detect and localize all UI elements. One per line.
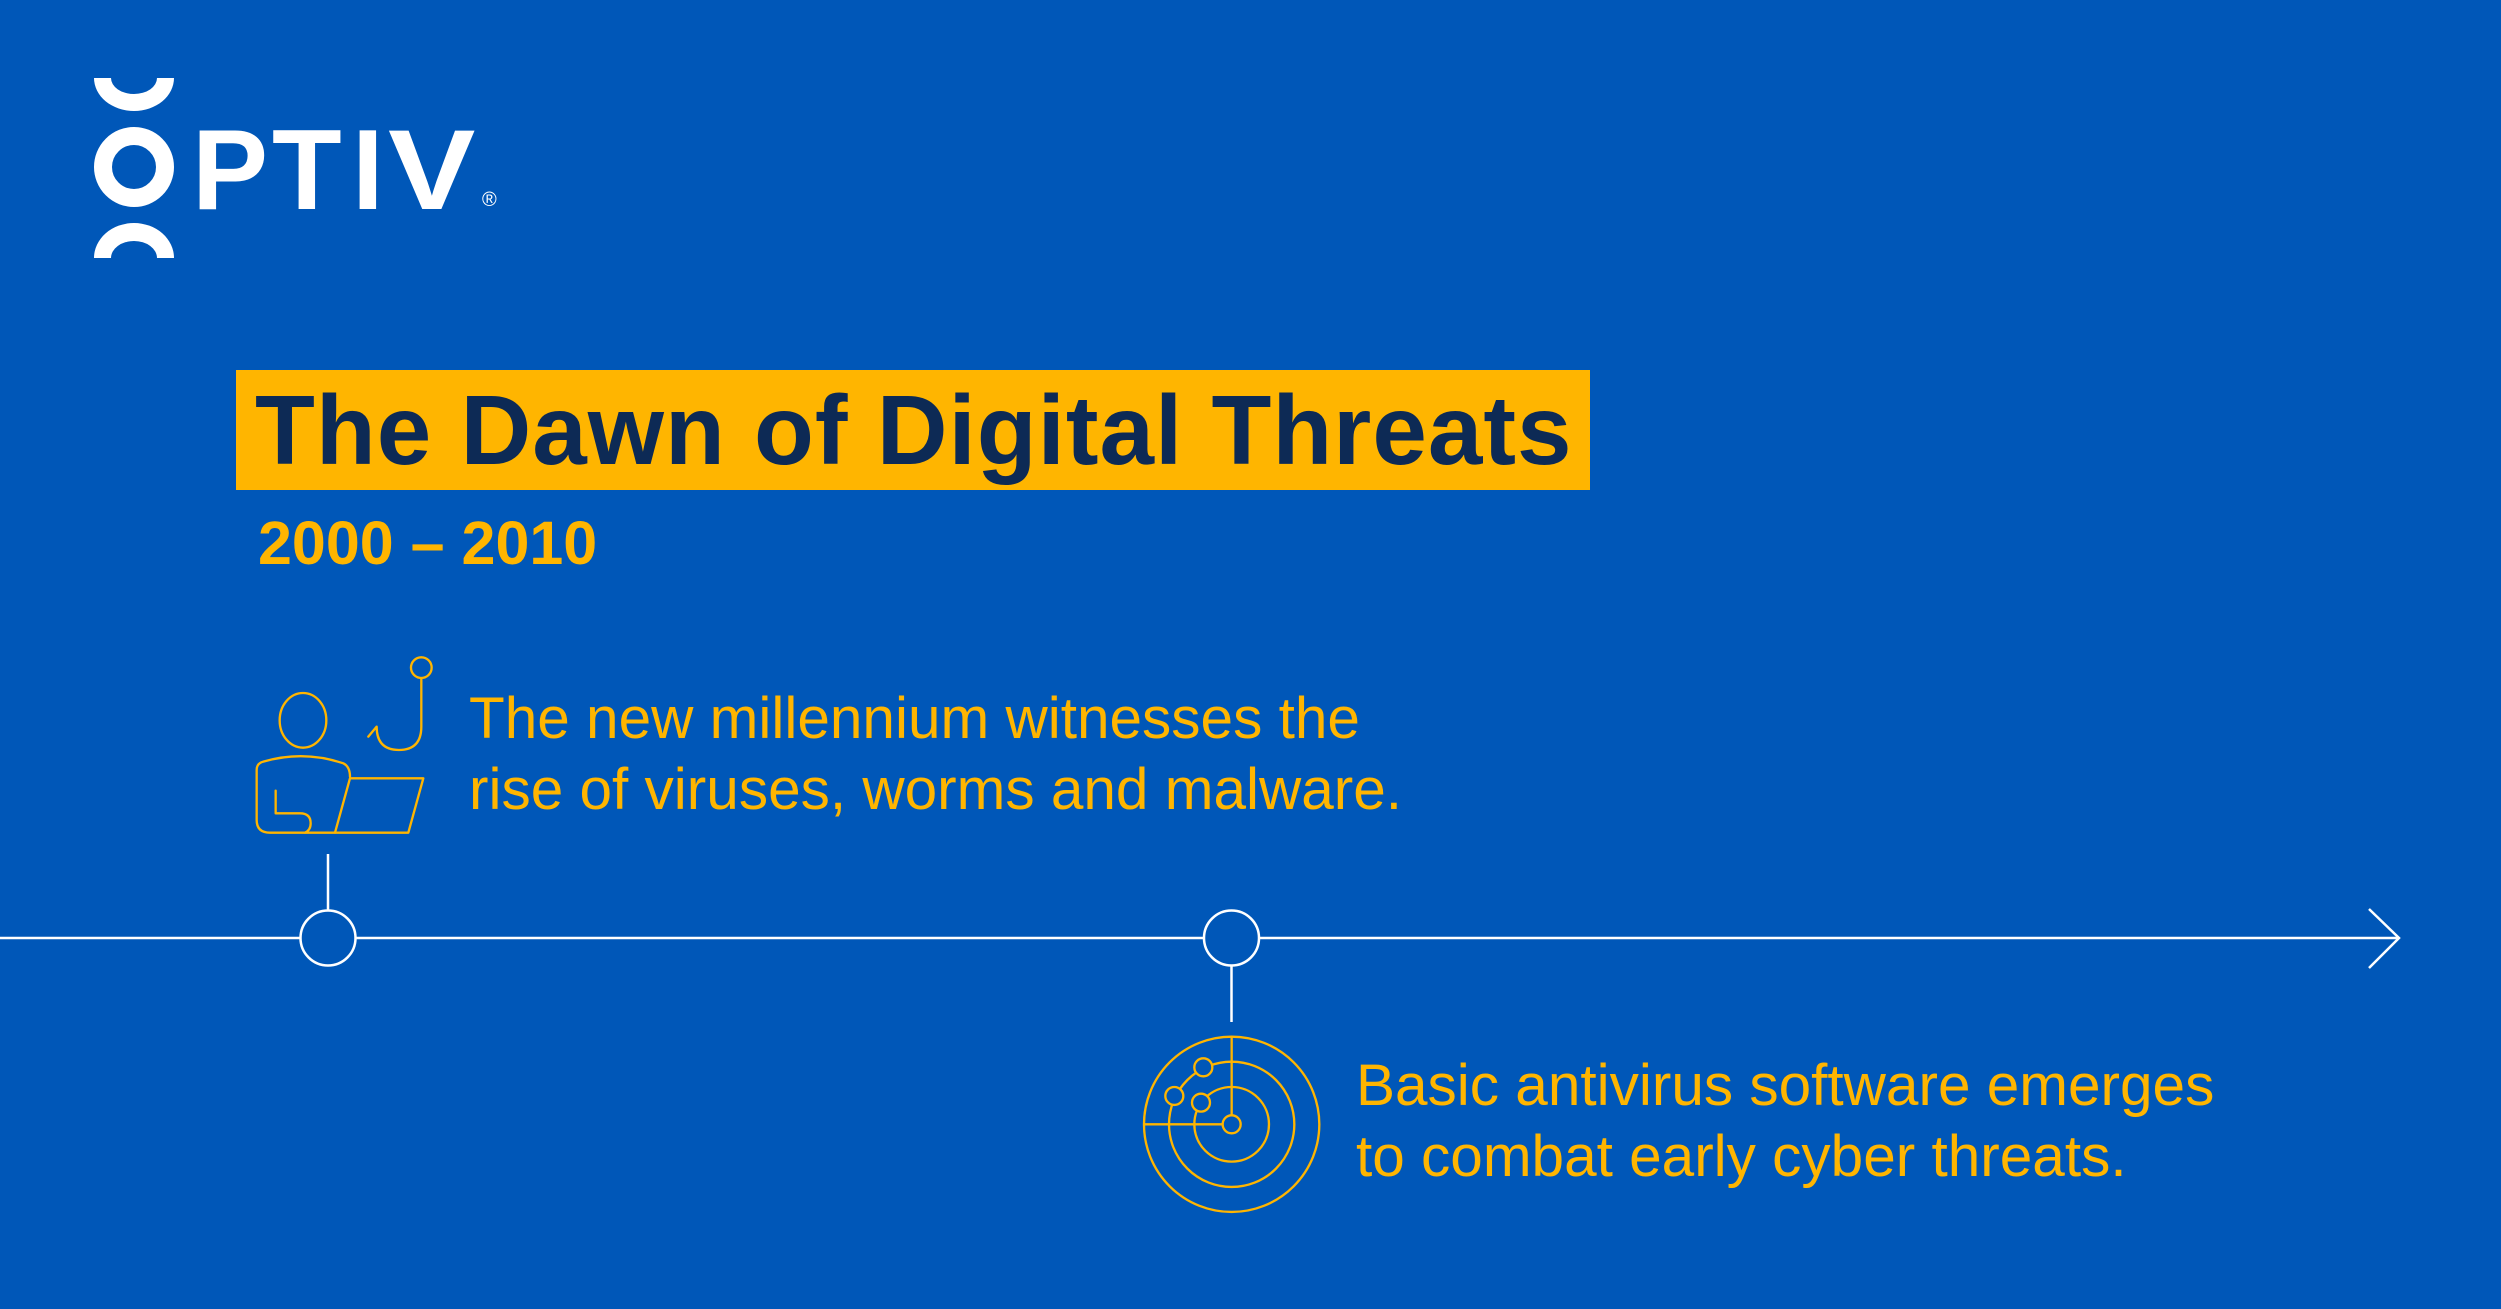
year range: 2000 – 2010	[258, 509, 597, 577]
icon: person at laptop with hook	[257, 657, 432, 833]
text: antivirus: Basic antivirus software emerges	[1356, 1053, 2214, 1118]
text: millennium threats	[469, 686, 1402, 822]
milestone 1	[300, 854, 356, 966]
logo: ®	[482, 189, 497, 211]
logo	[94, 78, 497, 258]
title: The Dawn of Digital Threats	[255, 375, 1572, 485]
text: antivirus: to combat early cyber threats.	[1356, 1124, 2127, 1189]
icon: radar	[1144, 1037, 1319, 1212]
logo: I	[352, 107, 384, 234]
logo: P	[192, 107, 268, 234]
arrowhead	[2369, 909, 2399, 968]
logo: V	[388, 107, 476, 234]
milestone 2	[1204, 910, 1259, 1022]
text: antivirus	[1356, 1053, 2214, 1189]
logo: T	[272, 107, 342, 234]
text: millennium threats: The new millennium witnesses the	[469, 686, 1360, 751]
title background	[236, 370, 1590, 490]
text: millennium threats: rise of viruses, worms and malware.	[469, 757, 1402, 822]
